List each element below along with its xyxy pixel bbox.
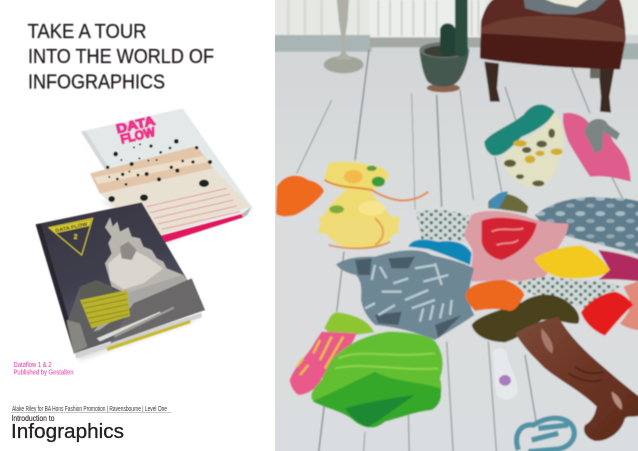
rock formation xyxy=(105,217,183,293)
photo: clothes on floor xyxy=(265,0,638,451)
lamp stand xyxy=(324,0,364,73)
caption: book credits xyxy=(14,360,74,376)
clothes: lime green top xyxy=(324,312,374,335)
clothes: yellow dress hem xyxy=(318,217,400,249)
radiator xyxy=(369,10,484,38)
credit line: Alake Riley for BA Hons Fashion Promotion | Ravensbourne | Level One xyxy=(12,404,167,413)
clothes: yellow dress xyxy=(318,162,400,233)
clothes: patterned scrap xyxy=(416,216,442,241)
clothes: patterned scrap xyxy=(417,210,472,242)
clothes: dark floral xyxy=(488,194,528,213)
clothes: yellow top xyxy=(534,246,611,278)
triangle logo: DATA FLOW xyxy=(55,222,88,234)
book 1 title: FLOW xyxy=(119,125,156,147)
floor boards xyxy=(318,252,537,451)
clothes: printed grey shirt xyxy=(336,250,474,340)
book 1: Data Flow xyxy=(81,108,257,247)
triangle logo: 2 xyxy=(74,234,78,241)
title: TAKE A TOUR xyxy=(28,20,146,43)
clothes: pink top xyxy=(563,113,631,182)
clothes: floral dress xyxy=(502,112,564,188)
clothes: orange top xyxy=(276,176,324,216)
book 1 title: DATA xyxy=(115,114,156,136)
book 1 title xyxy=(115,114,156,147)
wall xyxy=(265,0,638,35)
caption: book credits: Published by Gestalten xyxy=(14,368,74,376)
potted cactus xyxy=(419,0,469,92)
book covers: Data Flow 1 and 2 xyxy=(36,108,257,361)
footer heading: Introduction to xyxy=(12,414,55,423)
clothes: bright green scarf xyxy=(311,332,443,428)
clothes: magenta top xyxy=(598,250,638,282)
footer heading: Infographics xyxy=(11,420,124,443)
clothes: olive knit xyxy=(472,295,579,342)
brown leather boot xyxy=(516,317,638,441)
yellow text box xyxy=(80,290,130,328)
clothes: white and grey patterned xyxy=(515,277,620,308)
clothes: red top xyxy=(620,280,638,330)
blue strappy sandal xyxy=(517,418,574,451)
magazines xyxy=(523,0,610,15)
clothes: blue top xyxy=(408,240,472,265)
clothes: red and pink printed top xyxy=(463,211,568,283)
clear sandal xyxy=(492,348,518,400)
title xyxy=(28,20,214,94)
caption: book credits: Dataflow 1 & 2 xyxy=(14,360,52,369)
book 2: Data Flow 2 xyxy=(36,202,205,361)
leather footstool xyxy=(480,0,626,113)
clothes: teal top xyxy=(484,105,555,156)
clothes: grey-blue top xyxy=(535,197,638,255)
photo top half xyxy=(265,0,638,240)
title: INFOGRAPHICS xyxy=(28,70,165,94)
floor boards xyxy=(297,50,623,210)
clothes: pink and yellow striped xyxy=(290,332,357,395)
triangle logo xyxy=(49,218,93,255)
left white panel xyxy=(0,0,275,451)
title: INTO THE WORLD OF xyxy=(28,45,214,68)
photo bottom half xyxy=(290,197,638,451)
clothes: orange knit xyxy=(466,280,524,311)
